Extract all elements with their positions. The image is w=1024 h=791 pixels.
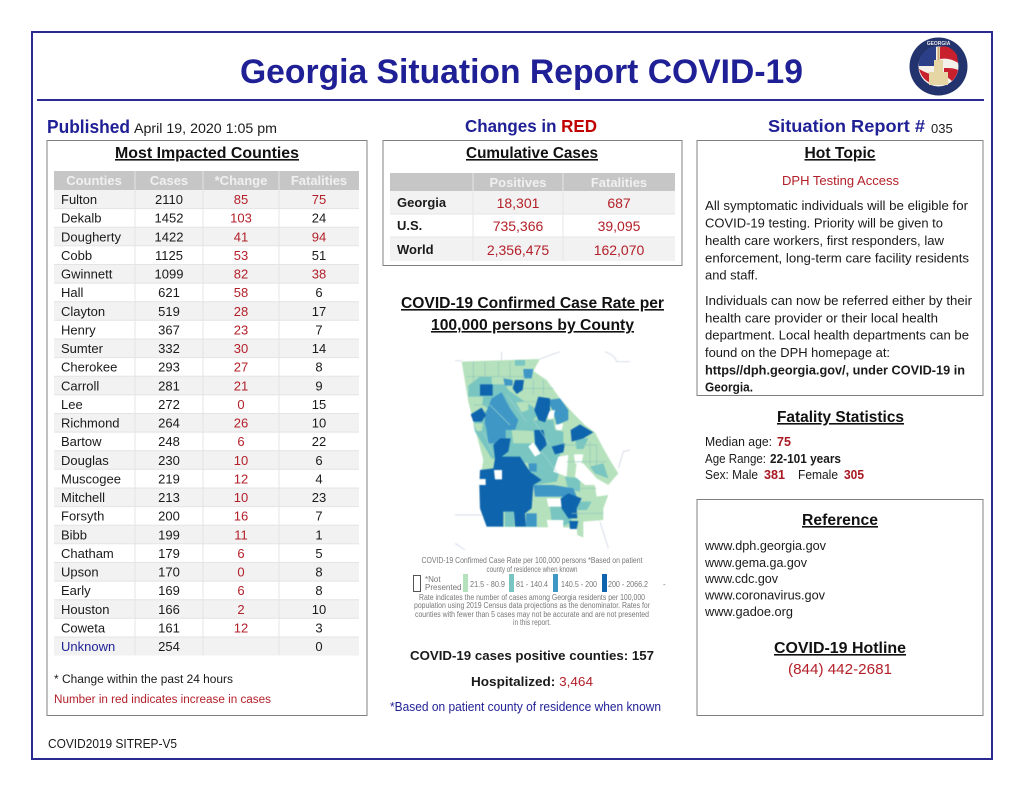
table: counties: Chatham [61,546,114,561]
table: counties: Clayton [61,304,105,319]
heading: situation report number: 035 [931,121,953,136]
table: counties: 2110 [155,192,183,207]
panel: reference [697,500,983,716]
table: counties: Cases [150,173,188,188]
heading: published: April 19, 2020 1:05 pm [134,121,277,136]
stat: hospitalized: Hospitalized: 3,464 [471,674,593,689]
map: Georgia counties choropleth [455,352,630,550]
table: counties: 27 [234,360,248,375]
text: referral paragraph: found on the DPH homepage at: [705,345,890,360]
table: counties: 17 [312,304,326,319]
table: counties: 12 [234,471,248,486]
table: counties: Fulton [61,192,97,207]
section: fatality statistics: 75 [777,435,791,449]
table: counties: 166 [158,602,180,617]
panel: hot topic [697,140,983,396]
table: cumulative cases [390,173,675,261]
table: counties: 22 [312,434,326,449]
text: referral paragraph: https//dph.georgia.gov/, under COVID-19 in [705,362,965,378]
table: counties: 7 [315,322,323,337]
table: counties: 10 [234,453,248,468]
table: counties: 75 [312,192,326,207]
table: counties: 9 [315,378,323,393]
table: counties: *Change [215,173,267,188]
section: fatality statistics [705,409,904,482]
table: counties: 6 [237,434,245,449]
table: counties: Dougherty [61,229,121,244]
list: reference links [704,539,827,619]
table: counties: 51 [312,248,326,263]
section: fatality statistics: Sex: Male [705,468,758,482]
text: referral paragraph: department. Local health departments can be [705,328,969,342]
table: counties: Richmond [61,416,120,430]
table: counties: 272 [158,397,180,412]
table: counties: 24 [312,211,326,226]
table: counties: Dekalb [61,211,101,226]
table: counties: 0 [237,397,245,412]
text: eligibility paragraph [705,198,970,282]
table: counties: 21 [234,378,248,393]
table: cumulative cases: 2,356,475 [487,242,549,258]
text: eligibility paragraph: health care workers, first responders, law [705,233,945,248]
text: eligibility paragraph: and staff. [705,268,758,282]
list: reference links: www.dph.georgia.gov [704,539,827,553]
section: fatality statistics: 381 [764,468,785,482]
heading: published [47,117,277,137]
table: counties: 103 [230,211,252,226]
map legend: county of residence when known [486,565,578,574]
table: counties [54,171,359,656]
map legend: 200 - 2066.2 [608,580,648,589]
text: hotline number: (844) 442-2681 [788,661,892,678]
table: counties: 8 [315,564,323,580]
table: cumulative cases: World [397,242,434,257]
heading: hot topic: Hot Topic [804,145,876,162]
table: counties: Mitchell [61,490,105,505]
map legend: COVID-19 Confirmed Case Rate per 100,000 persons *Based on patient [422,556,643,565]
table: counties: Sumter [61,341,104,356]
list: reference links: www.cdc.gov [704,572,779,586]
table: counties: Hall [61,285,84,300]
table: counties: 264 [158,416,180,430]
table: counties: 248 [158,434,180,449]
list: reference links: www.gema.ga.gov [704,556,808,570]
table: counties: Douglas [61,453,109,468]
table: counties: 10 [234,490,248,505]
table: cumulative cases: 735,366 [493,218,544,234]
table: counties: 2 [237,602,245,617]
table: counties: Bartow [61,434,102,449]
list: reference links: www.coronavirus.gov [704,588,826,602]
table: counties: 16 [234,509,248,524]
table: counties: 3 [315,620,323,635]
section: fatality statistics: 305 [844,468,864,482]
section: fatality statistics: Female [798,468,838,482]
table: counties: Early [61,583,91,598]
table: counties: 10 [312,416,326,430]
heading: cumulative cases: Cumulative Cases [466,145,598,162]
heading: changes in red: Changes in RED [465,116,597,136]
table: counties: 161 [158,620,180,635]
map legend: *Not [425,575,441,584]
map legend: Rate indicates the number of cases among Georgia residents per 100,000 [419,593,645,602]
table: counties: 12 [234,620,248,635]
section: fatality statistics: 22-101 years [770,452,841,466]
text: eligibility paragraph: All symptomatic individuals will be eligible for [705,198,969,213]
footnote: change window: * Change within the past 24 hours [54,674,233,686]
table: counties: 170 [158,564,180,580]
table: counties: 4 [315,471,323,486]
map legend [414,556,666,627]
table: counties: Coweta [61,620,106,635]
note: patient county: *Based on patient county of residence when known [390,700,661,714]
list: reference links: www.gadoe.org [704,605,793,619]
table: counties: 5 [315,546,323,561]
panel: most impacted counties [47,140,367,716]
table: counties: Upson [61,564,99,580]
heading: published: Published [47,117,130,137]
table: cumulative cases: 687 [607,195,631,211]
table: counties: 1422 [155,229,183,244]
table: counties: 213 [158,490,180,505]
table: counties: Carroll [61,378,99,393]
table: cumulative cases: 162,070 [594,242,645,258]
map legend: 81 - 140.4 [516,580,548,589]
map legend: population using 2019 Census data projections as the denominator. Rates for [414,601,650,610]
table: counties: Lee [61,397,83,412]
section: fatality statistics: Median age: [705,435,772,449]
table: counties: 1099 [155,266,183,282]
heading: hotline: COVID-19 Hotline [774,640,906,657]
table: cumulative cases: Fatalities [591,175,647,190]
table: counties: Counties [66,173,122,188]
heading: case rate map: COVID-19 Confirmed Case Rate per [401,295,664,312]
table: counties: Fatalities [291,173,347,188]
heading: most impacted counties: Most Impacted Counties [115,145,299,162]
footnote: red numbers: Number in red indicates increase in cases [54,694,271,706]
table: counties: 1452 [155,211,183,226]
table: counties: 199 [158,527,180,542]
table: counties: 26 [234,416,248,430]
table: cumulative cases: 18,301 [497,195,540,211]
table: counties: Houston [61,602,109,617]
text: referral paragraph: health care provider or their local health [705,310,938,326]
table: counties: 8 [315,583,323,598]
footer: version: COVID2019 SITREP-V5 [48,737,177,751]
title: Georgia Situation Report COVID-19 [240,53,803,91]
table: cumulative cases: Georgia [397,195,447,210]
table: counties: Cherokee [61,360,117,375]
table: counties: 94 [312,229,326,244]
table: counties: 38 [312,266,326,282]
table: counties: Forsyth [61,509,104,524]
table: counties: 82 [234,266,248,282]
map legend: 21.5 - 80.9 [470,580,506,589]
table: counties: 6 [315,453,323,468]
heading: case rate map [401,295,664,334]
text: referral paragraph: Georgia. [705,380,753,394]
table: counties: 179 [158,546,180,561]
table: counties: 230 [158,453,180,468]
stat: positive counties: COVID-19 cases positive counties: 157 [410,648,654,663]
map legend: - [663,580,666,589]
table: counties: 281 [158,378,180,393]
table: counties: 41 [234,229,248,244]
panel: cumulative cases [383,140,682,266]
table: counties: 6 [237,583,245,598]
table: counties: 519 [158,304,180,319]
table: counties: 23 [312,490,326,505]
table: cumulative cases: U.S. [397,218,422,233]
table: counties: 7 [315,509,323,524]
table: counties: 23 [234,322,248,337]
table: counties: 219 [158,471,180,486]
table: counties: Unknown [61,639,115,654]
table: counties: 10 [312,602,326,617]
text: eligibility paragraph: enforcement, long-term care facility residents [705,250,970,266]
map legend: in this report. [513,618,551,627]
icon: state seal: GEORGIA [927,41,951,47]
table: counties: 0 [237,564,245,580]
table: counties: 11 [234,527,248,542]
table: counties: 1 [315,527,323,542]
table: counties: 200 [158,509,180,524]
subheading: testing access: DPH Testing Access [782,173,899,188]
table: counties: Gwinnett [61,266,113,282]
table: counties: 53 [234,248,248,263]
heading: situation report number: Situation Report # [768,116,925,136]
table: counties: Henry [61,322,96,337]
icon: state seal [910,38,968,96]
table: counties: 621 [158,285,180,300]
table: counties: 6 [237,546,245,561]
table: counties: 14 [312,341,326,356]
text: eligibility paragraph: COVID-19 testing. Priority will be given to [705,216,943,230]
table: counties: 293 [158,360,180,375]
heading: reference: Reference [802,512,878,529]
table: counties: Muscogee [61,471,121,486]
table: counties: 85 [234,192,248,207]
text: referral paragraph [705,293,973,394]
map legend: 140.5 - 200 [561,580,597,589]
section: fatality statistics: Fatality Statistics [777,409,904,426]
table: counties: Cobb [61,248,92,263]
map legend: Presented [425,583,461,592]
table: counties: 15 [312,397,326,412]
table: counties: 58 [234,285,248,300]
table: cumulative cases: 39,095 [598,218,641,234]
table: cumulative cases: Positives [489,175,547,190]
table: counties: 0 [315,639,323,654]
table: counties: 30 [234,341,248,356]
table: counties: 1125 [155,248,183,263]
table: counties: 367 [158,322,180,337]
table: counties: 169 [158,583,180,598]
table: counties: 6 [315,285,323,300]
heading: case rate map: 100,000 persons by County [431,317,634,334]
table: counties: 8 [315,360,323,375]
table: counties: 254 [158,639,180,654]
text: referral paragraph: Individuals can now be referred either by their [705,293,973,308]
map legend: counties with fewer than 5 cases may not be accurate and are not presented [415,610,649,619]
section: fatality statistics: Age Range: [705,452,766,466]
table: counties: Bibb [61,527,87,542]
table: counties: 28 [234,304,248,319]
table: counties: 332 [158,341,180,356]
